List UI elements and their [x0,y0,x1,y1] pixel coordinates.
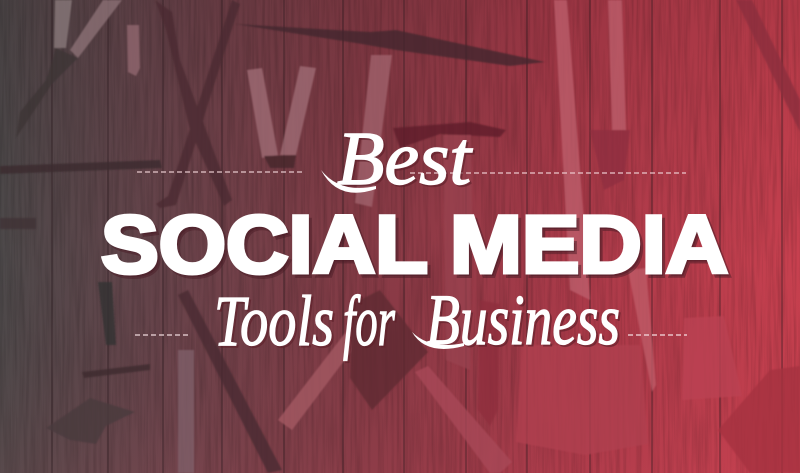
heading: SOCIAL MEDIA: MEDIA [453,203,731,294]
dashed rule: lower left [135,334,188,336]
tool: chisel [127,25,140,76]
heading: Tools for Business: for [345,283,398,363]
dashed rule: upper right [410,172,686,174]
heading: Tools for Business: Tools [216,283,336,363]
heading: Best: Best [337,117,473,201]
tool: rasp [98,282,116,345]
heading: SOCIAL MEDIA [101,200,731,294]
heading: Tools for Business: Business [428,282,622,362]
tool: shears [16,0,122,138]
tool: pick [235,24,545,207]
tool: horizontal bar [0,160,162,174]
heading: Tools for Business: Business [426,280,620,360]
heading: SOCIAL MEDIA: SOCIAL [101,200,428,290]
heading: Tools for Business [214,280,622,363]
dashed rule: lower right [628,334,687,336]
tool: stake [628,268,656,392]
tool: axe with diagonal handles [278,290,512,473]
tool: small spade [682,316,742,400]
tool: diagonal bar lower [178,290,282,473]
tool: shovel blade top [590,130,630,190]
tool: short bar [0,218,36,229]
tool: shovel [516,345,648,455]
tool: dark diagonal bar [736,0,800,132]
dashed rule: upper left [137,171,305,173]
heading: SOCIAL MEDIA: MEDIA [450,200,728,290]
tool: mitten shape [718,366,800,473]
heading: Best: Best [339,119,475,203]
tool: lower handle [178,350,194,473]
tool: long handles [554,0,626,300]
tool: small hammer [82,364,150,378]
tool: handle base [264,155,296,168]
tool: machete [478,300,500,426]
tool: axe head lower left [46,398,135,444]
tool: long tongs [155,0,240,208]
heading: SOCIAL MEDIA: SOCIAL [104,203,431,294]
heading: Tools for Business: Tools [214,281,334,361]
heading: Tools for Business: for [343,281,396,361]
tool: hatchet [393,122,506,370]
tool: hatchet handles [247,66,316,158]
